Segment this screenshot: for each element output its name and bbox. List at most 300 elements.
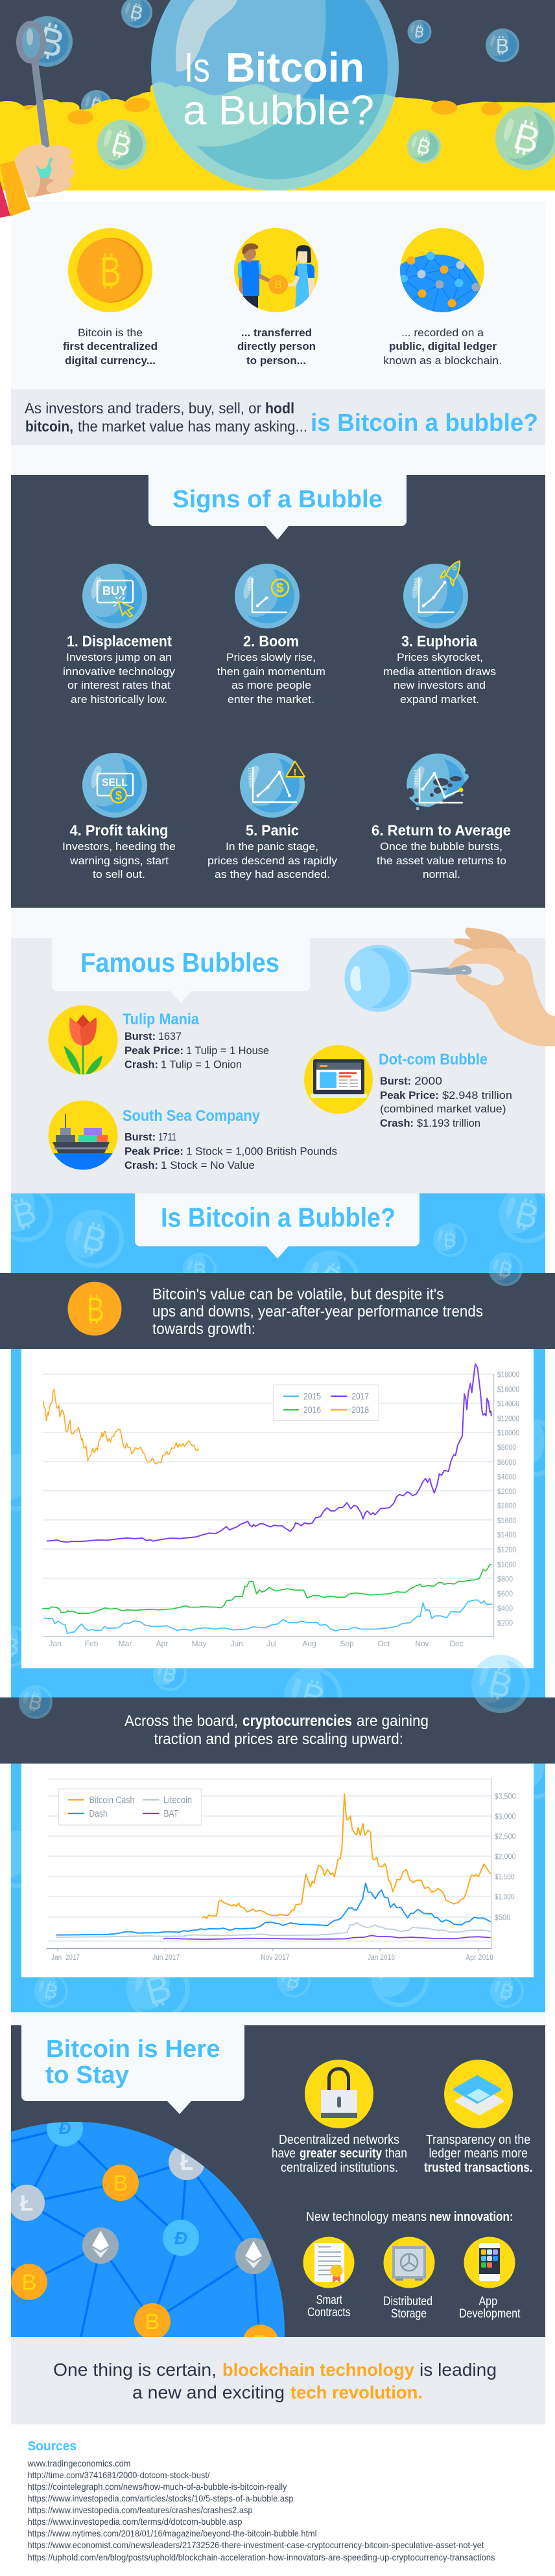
node: dash centre: Đ bbox=[174, 2228, 187, 2248]
decorative faint bubbles: B bbox=[284, 1969, 303, 1994]
label: app development: Development bbox=[459, 2307, 521, 2321]
decorative faint bubbles: B bbox=[443, 1230, 456, 1252]
chart: altcoin prices bbox=[21, 1764, 534, 1977]
text: many asking: the market value has many asking... bbox=[78, 418, 307, 435]
icon: people transferring coin: B bbox=[274, 279, 282, 291]
south sea company: 1 Stock = No Value bbox=[161, 1159, 255, 1171]
y axis labels: $12000 bbox=[497, 1414, 519, 1423]
panel: tech revolution conclusion: is leading bbox=[419, 2360, 497, 2380]
x axis months: Apr bbox=[156, 1639, 168, 1648]
y axis labels: $1000 bbox=[497, 1560, 516, 1569]
line: 2016 bbox=[43, 1565, 491, 1613]
y axis labels: $8000 bbox=[497, 1443, 516, 1452]
sign 3: euphoria: media attention draws bbox=[383, 665, 496, 678]
band: cryptocurrencies text bbox=[0, 1697, 555, 1764]
text: volatile but growing: towards growth: bbox=[152, 1320, 255, 1338]
text: new innovation bbox=[306, 2210, 514, 2224]
south sea company: Peak Price: bbox=[124, 1145, 183, 1157]
node: ethereum right bbox=[235, 2238, 272, 2274]
icon: padlock bbox=[305, 2060, 373, 2128]
sign 5: panic: prices descend as rapidly bbox=[207, 855, 338, 867]
tulip mania: Burst: bbox=[124, 1030, 156, 1042]
y axis labels: $1,500 bbox=[494, 1872, 515, 1881]
bubble over band left: B bbox=[26, 1690, 45, 1715]
icon: buy button: BUY bbox=[102, 584, 127, 597]
sign 3: euphoria: 3. Euphoria bbox=[401, 632, 477, 649]
decorative faint bubbles: B bbox=[497, 1979, 516, 2004]
y axis labels: $3,000 bbox=[494, 1811, 516, 1821]
label: distributed storage: Storage bbox=[391, 2307, 427, 2321]
text: many asking bbox=[25, 400, 307, 435]
south sea company: 1 Stock = 1,000 British Pounds bbox=[186, 1145, 337, 1157]
panel: spacer bbox=[11, 908, 545, 938]
dot-com bubble bbox=[304, 1045, 512, 1129]
text: volatile but growing: ups and downs, year-after-year performance trends bbox=[152, 1303, 483, 1320]
icon: smart contracts bbox=[303, 2237, 354, 2288]
text: trusted transactions bbox=[424, 2133, 533, 2175]
x axis months: Mar bbox=[119, 1639, 132, 1648]
text: volatile but growing: Bitcoin's value can be volatile, but despite it's bbox=[152, 1285, 443, 1304]
bubble over band: B bbox=[496, 1258, 515, 1282]
text: transferred person to person: ... transferred bbox=[241, 327, 312, 339]
tulip mania: Peak Price: bbox=[124, 1044, 183, 1057]
small bubble top right: B bbox=[414, 23, 425, 41]
dot-com bubble: $1.193 trillion bbox=[417, 1117, 480, 1129]
label: smart contracts: Contracts bbox=[307, 2306, 350, 2319]
callout: famous bubbles bbox=[52, 938, 310, 1003]
panel: tech revolution conclusion: One thing is certain, bbox=[53, 2360, 217, 2380]
legend: years: 2015 bbox=[303, 1391, 321, 1402]
sign 3: euphoria: Prices skyrocket, bbox=[397, 651, 483, 663]
x axis months: Aug bbox=[302, 1639, 316, 1648]
node: bitcoin bottom bbox=[134, 2303, 171, 2340]
x axis months: Jun bbox=[230, 1639, 243, 1648]
panel: tech revolution conclusion: blockchain technology bbox=[222, 2360, 414, 2380]
icon: bitcoin coin: B bbox=[100, 248, 121, 295]
y axis labels: $1600 bbox=[497, 1516, 516, 1525]
panel: tech revolution conclusion: a new and exciting bbox=[132, 2382, 285, 2402]
y axis labels: $1800 bbox=[497, 1501, 516, 1510]
south sea company: 1711 bbox=[158, 1131, 176, 1143]
sign 5: panic: as they had ascended. bbox=[215, 868, 330, 880]
panel: famous bubbles bbox=[11, 928, 555, 1193]
sign 5: panic: In the panic stage, bbox=[226, 840, 318, 853]
sign 6: return to average: the asset value returns to bbox=[377, 855, 506, 867]
icon: people transferring coin bbox=[234, 228, 318, 312]
node: bitcoin lower left: B bbox=[22, 2270, 36, 2295]
text: greater security: than bbox=[385, 2146, 407, 2161]
icon: sell button: SELL bbox=[102, 776, 128, 788]
node: bitcoin: B bbox=[113, 2171, 128, 2196]
callout: signs of a bubble: Signs of a Bubble bbox=[172, 486, 383, 513]
source list: https://www.investopedia.com/terms/d/dotcom-bubble.asp bbox=[27, 2516, 242, 2527]
decorative faint bubbles: B bbox=[9, 1193, 41, 1236]
sign 2: boom: as more people bbox=[231, 679, 311, 691]
pile of gold coins bbox=[0, 82, 555, 190]
icon: transparent layers bbox=[444, 2060, 513, 2128]
sign 2: boom bbox=[217, 564, 325, 706]
band: cryptocurrencies text: cryptocurrencies bbox=[242, 1712, 352, 1730]
label: smart contracts bbox=[307, 2294, 350, 2319]
sign 4: profit taking: warning signs, start bbox=[69, 855, 169, 867]
icon: bitcoin coin bbox=[68, 228, 152, 312]
text: first decentralized bbox=[63, 327, 158, 367]
icon: burst bubble chart bbox=[407, 753, 469, 810]
label: distributed storage: Distributed bbox=[383, 2295, 432, 2308]
bubble over band right: B bbox=[484, 1663, 516, 1706]
band: cryptocurrencies text: are gaining bbox=[357, 1712, 429, 1730]
title: Bitcoin bbox=[226, 44, 364, 91]
y axis labels bbox=[497, 1370, 519, 1627]
x axis months: May bbox=[192, 1639, 206, 1648]
bubble far right: B bbox=[496, 35, 509, 57]
band: cryptocurrencies text: traction and prices are scaling upward: bbox=[154, 1731, 403, 1748]
sign 4: profit taking: to sell out. bbox=[93, 868, 145, 880]
chart: bitcoin price by year bbox=[21, 1349, 534, 1668]
icon: bitcoin coin bbox=[67, 1282, 122, 1336]
sign 1: displacement: Investors jump on an bbox=[66, 651, 172, 663]
sign 6: return to average: Once the bubble bursts, bbox=[380, 840, 502, 853]
icon: tulip bbox=[48, 1006, 118, 1075]
big bubble on gold right: B bbox=[510, 116, 544, 162]
bubble over band right bbox=[471, 1655, 530, 1713]
text: greater security: Decentralized networks bbox=[279, 2133, 399, 2147]
icon: buy button bbox=[82, 564, 147, 628]
tulip mania: 1 Tulip = 1 Onion bbox=[161, 1059, 242, 1070]
node: bitcoin lower left bbox=[11, 2264, 47, 2300]
source list: https://cointelegraph.com/news/how-much-of-a-bubble-is-bitcoin-really bbox=[27, 2481, 287, 2492]
y axis labels: $18000 bbox=[497, 1370, 519, 1379]
big bubble on gold right bbox=[495, 106, 555, 170]
line: dash bbox=[56, 1883, 490, 1935]
y axis labels: $1400 bbox=[497, 1530, 516, 1539]
text: first decentralized: digital currency... bbox=[65, 354, 156, 367]
dot-com bubble: Crash: bbox=[380, 1117, 414, 1129]
panel: is bitcoin a bubble blue background bbox=[0, 1185, 555, 2021]
giant central bubble bbox=[151, 0, 399, 190]
sign 1: displacement: innovative technology bbox=[63, 665, 176, 678]
text: recorded on ledger: known as a blockchain. bbox=[383, 354, 502, 367]
decorative faint bubbles: B bbox=[141, 1967, 176, 2013]
icon: sell button: $ bbox=[115, 789, 122, 802]
floating bubble behind gold: B bbox=[88, 95, 105, 118]
source list: www.tradingeconomics.com bbox=[27, 2458, 131, 2468]
sign 1: displacement bbox=[63, 564, 176, 706]
y axis labels: $3,500 bbox=[494, 1792, 516, 1801]
source list: https://www.investopedia.com/features/crashes/crashes2.asp bbox=[27, 2505, 253, 2515]
illustration: blockchain network globe bbox=[11, 2122, 285, 2337]
band: bitcoin value text bbox=[0, 1273, 555, 1349]
icon: boom chart: $ bbox=[276, 581, 284, 595]
label: app development bbox=[459, 2295, 521, 2321]
text: trusted transactions: Transparency on the bbox=[426, 2133, 530, 2147]
y axis labels: $1200 bbox=[497, 1545, 516, 1554]
text: recorded on ledger: public, digital ledger bbox=[389, 340, 497, 352]
callout: signs of a bubble bbox=[148, 475, 407, 540]
node: litecoin right: Ł bbox=[180, 2150, 193, 2175]
text: is bitcoin a bubble highlight: is Bitcoin a bubble? bbox=[311, 409, 538, 437]
panel: signs of a bubble bbox=[11, 475, 545, 908]
y axis labels: $400 bbox=[497, 1604, 513, 1613]
node: bitcoin bottom right bbox=[244, 2325, 278, 2337]
bubble on gold left bbox=[97, 120, 147, 169]
tulip mania bbox=[48, 1006, 269, 1075]
sign 4: profit taking: Investors, heeding the bbox=[62, 840, 176, 853]
dot-com bubble: (combined market value) bbox=[380, 1103, 506, 1115]
x axis months: Nov bbox=[415, 1639, 429, 1648]
callout: bitcoin is here to stay: Bitcoin is Here bbox=[46, 2036, 220, 2063]
band: cryptocurrencies text: Across the board, bbox=[124, 1712, 238, 1730]
y axis labels: $14000 bbox=[497, 1399, 519, 1409]
y axis labels: $2,500 bbox=[494, 1832, 516, 1841]
source list: https://www.investopedia.com/articles/stocks/10/5-steps-of-a-bubble.asp bbox=[27, 2493, 294, 2503]
x axis dates: Jun 2017 bbox=[152, 1953, 180, 1962]
sign 3: euphoria: expand market. bbox=[400, 693, 479, 706]
dot-com bubble: 2000 bbox=[414, 1075, 442, 1087]
tulip mania: 1 Tulip = 1 House bbox=[186, 1044, 269, 1057]
line: bat bbox=[164, 1935, 490, 1939]
x axis dates: Jan 2018 bbox=[368, 1953, 395, 1962]
source list: https://www.economist.com/news/leaders/21732526-there-investment-case-cryptocurrency-bitcoin-speculative-asset-not-yet bbox=[27, 2540, 484, 2550]
legend: coins: Dash bbox=[89, 1808, 108, 1819]
sources bbox=[27, 2439, 495, 2562]
tulip mania: Tulip Mania bbox=[123, 1011, 200, 1028]
text: greater security: have bbox=[272, 2146, 296, 2161]
decorative faint bubbles: B bbox=[193, 1259, 206, 1282]
callout: is bitcoin a bubble: Is Bitcoin a Bubble? bbox=[161, 1202, 396, 1232]
south sea company: Crash: bbox=[124, 1159, 158, 1171]
icon: hand holding bubble wand bbox=[0, 23, 75, 218]
south sea company bbox=[45, 1100, 337, 1173]
y axis labels: $200 bbox=[497, 1618, 513, 1627]
sign 1: displacement: are historically low. bbox=[71, 693, 167, 706]
y axis labels: $10000 bbox=[497, 1428, 519, 1437]
x axis dates: Nov 2017 bbox=[261, 1953, 290, 1962]
label: smart contracts: Smart bbox=[316, 2294, 343, 2307]
sign 4: profit taking bbox=[62, 753, 176, 880]
callout: bitcoin is here to stay: to Stay bbox=[45, 2062, 129, 2089]
small bubble top right bbox=[407, 19, 432, 44]
x axis dates: Jan 2017 bbox=[51, 1953, 80, 1962]
sign 2: boom: Prices slowly rise, bbox=[226, 651, 316, 663]
sign 3: euphoria bbox=[383, 561, 496, 706]
legend: years: 2017 bbox=[351, 1391, 369, 1402]
bubble on gold left: B bbox=[108, 126, 136, 163]
bubble on gold centre right bbox=[407, 130, 441, 163]
icon: hand pinching bubble with needle bbox=[344, 928, 555, 1046]
text: recorded on ledger bbox=[383, 327, 502, 367]
node: bitcoin bottom: B bbox=[145, 2310, 159, 2334]
small bubble top left: B bbox=[128, 1, 145, 25]
x axis months: Jul bbox=[266, 1639, 277, 1648]
y axis labels bbox=[494, 1792, 516, 1922]
icon: rocket chart bbox=[403, 561, 468, 628]
sign 6: return to average bbox=[372, 753, 511, 880]
dot-com bubble: Dot-com Bubble bbox=[379, 1051, 488, 1068]
panel: tech revolution conclusion bbox=[11, 2337, 545, 2424]
decorative faint bubbles bbox=[0, 1185, 555, 2021]
line: 2015 bbox=[44, 1600, 492, 1633]
x axis months: Jan bbox=[49, 1639, 62, 1648]
tulip mania: 1637 bbox=[158, 1030, 182, 1042]
legend: coins bbox=[58, 1789, 201, 1825]
text: transferred person to person: to person... bbox=[246, 354, 306, 367]
legend: years: 2018 bbox=[351, 1405, 369, 1416]
icon: panic chart bbox=[240, 753, 305, 818]
x axis dates bbox=[51, 1953, 493, 1962]
text: greater security bbox=[272, 2133, 407, 2175]
icon: boom chart bbox=[235, 564, 300, 628]
text: volatile but growing bbox=[152, 1285, 483, 1338]
text: many asking: hodl bbox=[265, 400, 294, 417]
x axis months: Sep bbox=[340, 1639, 354, 1648]
text: many asking: bitcoin, bbox=[25, 418, 73, 435]
south sea company: Burst: bbox=[124, 1131, 156, 1143]
title bbox=[183, 44, 374, 133]
dot-com bubble: Peak Price: bbox=[380, 1089, 439, 1101]
y axis labels: $6000 bbox=[497, 1458, 516, 1467]
sign 4: profit taking: 4. Profit taking bbox=[70, 822, 169, 838]
decorative faint bubbles: B bbox=[160, 1662, 179, 1687]
text: trusted transactions: ledger means more bbox=[429, 2146, 528, 2161]
panel: spacer bbox=[11, 2012, 545, 2025]
node: litecoin left bbox=[8, 2185, 45, 2221]
sign 6: return to average: 6. Return to Average bbox=[372, 822, 511, 838]
callout: famous bubbles: Famous Bubbles bbox=[80, 947, 279, 978]
sign 6: return to average: normal. bbox=[423, 868, 460, 880]
node: bitcoin bottom right: B bbox=[254, 2331, 268, 2356]
source list: http://time.com/3741681/2000-dotcom-stock-bust/ bbox=[27, 2470, 210, 2480]
text: new innovation: new innovation: bbox=[429, 2210, 514, 2224]
icon: sell button bbox=[82, 753, 147, 818]
bubble over band left bbox=[19, 1685, 53, 1719]
title: a Bubble? bbox=[183, 87, 374, 133]
label: distributed storage bbox=[383, 2295, 432, 2321]
icon: bitcoin coin: B bbox=[87, 1291, 104, 1329]
text: trusted transactions: trusted transactions. bbox=[424, 2161, 533, 2175]
network links bbox=[11, 2128, 259, 2337]
sign 1: displacement: 1. Displacement bbox=[67, 632, 172, 649]
large bubble top left bbox=[22, 16, 73, 67]
icon: blockchain ledger bbox=[400, 228, 484, 312]
decorative faint bubbles: B bbox=[3, 1633, 19, 1661]
y axis labels: $800 bbox=[497, 1574, 513, 1583]
y axis labels: $500 bbox=[494, 1913, 511, 1922]
tulip mania: Crash: bbox=[124, 1059, 158, 1070]
bubble on gold centre right: B bbox=[414, 135, 433, 159]
line: bitcoin cash bbox=[202, 1794, 490, 1918]
hero banner bbox=[0, 0, 555, 190]
y axis labels: $4000 bbox=[497, 1472, 516, 1481]
legend: coins: Bitcoin Cash bbox=[89, 1795, 135, 1806]
decorative faint bubbles: B bbox=[78, 1218, 110, 1261]
y axis labels: $600 bbox=[497, 1589, 513, 1598]
dot-com bubble: $2.948 trillion bbox=[442, 1089, 512, 1101]
sign 2: boom: enter the market. bbox=[228, 693, 314, 706]
legend: years: 2016 bbox=[303, 1405, 321, 1416]
y axis labels: $2,000 bbox=[494, 1852, 516, 1861]
label: app development: App bbox=[478, 2295, 497, 2308]
y axis labels: $1,000 bbox=[494, 1892, 515, 1901]
data lines bbox=[43, 1364, 492, 1633]
callout: is bitcoin a bubble bbox=[135, 1193, 419, 1258]
panel: bitcoin is here to stay bbox=[11, 2025, 545, 2337]
bubble far right bbox=[486, 29, 519, 62]
dot-com bubble: Burst: bbox=[380, 1075, 411, 1087]
decorative faint bubbles: B bbox=[511, 1195, 543, 1237]
line: 2017 bbox=[47, 1364, 491, 1542]
sign 2: boom: 2. Boom bbox=[243, 632, 299, 649]
x axis months: Dec bbox=[449, 1639, 464, 1648]
icon: laptop bbox=[304, 1045, 373, 1114]
sign 5: panic: 5. Panic bbox=[246, 822, 299, 838]
decorative faint bubbles: B bbox=[41, 1979, 60, 2004]
text: transferred person to person: directly person bbox=[237, 340, 316, 352]
data lines bbox=[56, 1794, 490, 1939]
panel: what is bitcoin bbox=[11, 201, 545, 475]
icon: app development bbox=[464, 2237, 515, 2288]
text: greater security: centralized institutions. bbox=[281, 2161, 398, 2175]
node: dash centre bbox=[163, 2220, 199, 2256]
node: dash top: Đ bbox=[59, 2119, 71, 2138]
node: bitcoin bbox=[102, 2165, 139, 2201]
sign 1: displacement: or interest rates that bbox=[67, 679, 171, 691]
node: litecoin left: Ł bbox=[20, 2191, 33, 2216]
decorative faint bubbles: B bbox=[297, 1675, 329, 1718]
legend: coins: Litecoin bbox=[163, 1795, 192, 1806]
large bubble top left: B bbox=[33, 17, 69, 66]
y axis labels: $16000 bbox=[497, 1385, 519, 1394]
text: many asking: As investors and traders, buy, sell, or bbox=[25, 400, 261, 417]
y axis labels: $2000 bbox=[497, 1487, 516, 1496]
icon: distributed storage bbox=[384, 2237, 434, 2288]
south sea company: South Sea Company bbox=[123, 1107, 261, 1125]
legend: coins: BAT bbox=[163, 1808, 178, 1819]
sign 3: euphoria: new investors and bbox=[394, 679, 486, 691]
source list: https://uphold.com/en/blog/posts/uphold/blockchain-acceleration-how-innovators-are-speeding-up-cryptocurrency-transactions bbox=[27, 2552, 495, 2562]
decorative faint bubbles: B bbox=[311, 1258, 349, 1303]
callout: bitcoin is here to stay bbox=[21, 2012, 244, 2114]
x axis months: Feb bbox=[85, 1639, 99, 1648]
text: new innovation: New technology means bbox=[306, 2210, 427, 2224]
node: ethereum bbox=[82, 2227, 119, 2264]
text: greater security: greater security bbox=[300, 2146, 383, 2161]
text: recorded on ledger: ... recorded on a bbox=[401, 327, 484, 339]
icon: panic chart: ! bbox=[293, 767, 297, 778]
node: dash top bbox=[47, 2122, 83, 2146]
sources: Sources bbox=[27, 2439, 77, 2454]
x axis dates: Apr 2018 bbox=[466, 1953, 493, 1962]
text: first decentralized: first decentralized bbox=[63, 340, 158, 352]
x axis months: Oct bbox=[378, 1639, 390, 1648]
text: transferred person to person bbox=[237, 327, 316, 367]
icon: ship bbox=[48, 1100, 118, 1170]
legend: years bbox=[274, 1385, 379, 1420]
source list: https://www.nytimes.com/2018/01/16/magazine/beyond-the-bitcoin-bubble.html bbox=[27, 2528, 316, 2538]
bubble over band bbox=[489, 1252, 523, 1286]
line: litecoin bbox=[56, 1923, 490, 1937]
panel: tech revolution conclusion: tech revolution. bbox=[290, 2382, 423, 2402]
sign 5: panic bbox=[207, 753, 338, 880]
title: Is bbox=[184, 44, 210, 91]
floating bubble behind gold bbox=[81, 90, 112, 121]
line: 2018 bbox=[43, 1389, 198, 1464]
small bubble top left bbox=[121, 0, 152, 28]
sign 2: boom: then gain momentum bbox=[217, 665, 325, 678]
source list bbox=[27, 2458, 495, 2562]
text: first decentralized: Bitcoin is the bbox=[78, 327, 143, 339]
node: litecoin right bbox=[169, 2148, 204, 2180]
